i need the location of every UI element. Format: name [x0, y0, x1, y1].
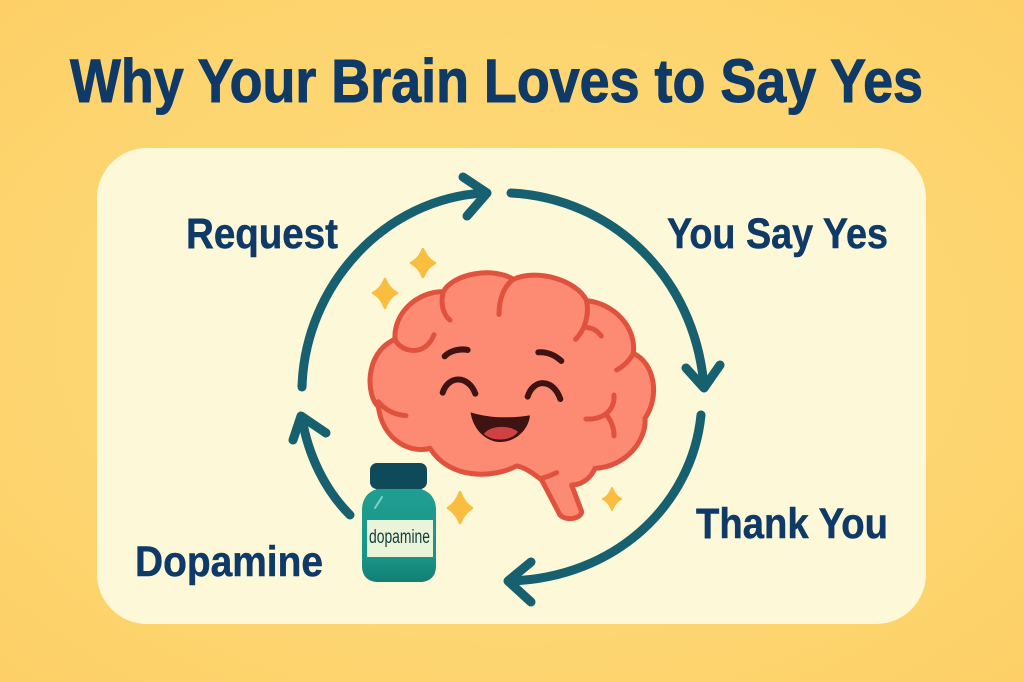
bottle neck — [376, 484, 422, 494]
brows and eyes — [443, 349, 561, 399]
tongue — [484, 427, 518, 439]
arrow: dopamine to request — [293, 416, 350, 515]
label — [367, 520, 433, 557]
title: Why Your Brain Loves to Say Yes — [70, 47, 923, 115]
brain outline — [370, 273, 654, 519]
arrow: thank you to dopamine — [508, 415, 701, 602]
glass highlight — [375, 497, 382, 508]
brain folds — [378, 279, 633, 478]
mouth — [471, 412, 530, 442]
icon: sparkle left — [373, 279, 397, 308]
label: Request: Request — [186, 210, 338, 258]
label: Dopamine: Dopamine — [135, 538, 323, 586]
icon: sparkle bottom right — [603, 488, 621, 510]
icon: smiling brain — [370, 273, 654, 519]
icon: sparkle bottom left — [448, 492, 472, 523]
panel: cycle background — [97, 148, 926, 624]
label: You Say Yes: You Say Yes — [667, 210, 888, 258]
icon: sparkle top — [411, 249, 435, 277]
label: Thank You: Thank You — [696, 500, 888, 548]
bottle body — [362, 489, 436, 582]
arrow: yes to thank you — [511, 193, 720, 388]
icon: dopamine bottle — [362, 463, 436, 582]
label text: dopamine — [369, 527, 430, 548]
arrow: request to yes — [302, 177, 487, 387]
bottle cap — [370, 463, 427, 489]
